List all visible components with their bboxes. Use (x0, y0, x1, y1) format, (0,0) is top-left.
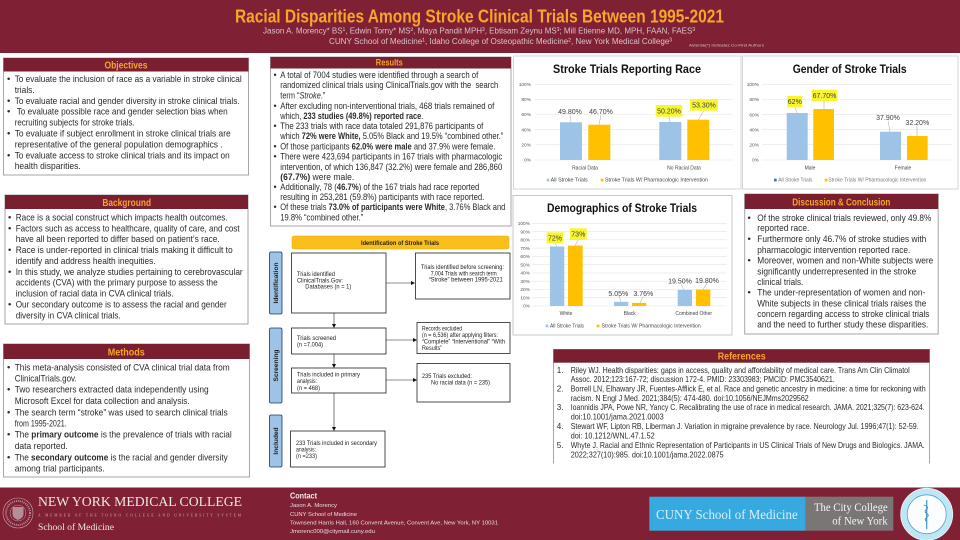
text block: objectives: • (7, 150, 10, 161)
x axis labels: Male (805, 165, 816, 171)
text block: methods: among trial participants. (15, 464, 105, 475)
authors: Jason A. Morency* BS¹, Edwin Torny* MS², Maya Pandit MPH³, Ebtisam Zeynu MS³; Mill Etienne MD, MPH, FAAN, FAES³ (263, 26, 695, 36)
box: trials screened: Trials screened (297, 335, 336, 342)
text block: results: • (274, 70, 277, 80)
text block: objectives: To evaluate possible race and gender selection bias when (17, 107, 228, 118)
y axis labels: 50% (520, 262, 531, 268)
x axis labels: Female (895, 165, 912, 171)
y axis labels: 70% (520, 246, 531, 252)
text block: references: 1. (557, 366, 563, 375)
box: trials identified before screening: 7,004 Trials with search term (431, 270, 497, 277)
text block: references: Riley WJ. Health disparities: gaps in access, quality and affordability of medical care. Trans Am Clin Climatol (571, 366, 910, 375)
data labels: 73% (571, 232, 585, 239)
text block: methods: The search term “stroke” was used to search clinical trials (15, 407, 228, 418)
data labels: 32.20% (905, 120, 929, 127)
logo: new york medical college wordmark: A MEMBER OF THE TOURO COLLEGE AND UNIVERSITY SYSTEM (38, 513, 242, 517)
y axis labels (519, 82, 532, 164)
text block: methods: from 1995-2021. (15, 418, 67, 429)
text block: results: which, 233 studies (49.8%) reported race. (279, 111, 423, 121)
heading: results: Results (376, 58, 403, 68)
logo: cuny school of medicine: CUNY School of Medicine (656, 507, 798, 522)
text block: objectives: health disparities. (15, 161, 81, 172)
text block: methods: Two researchers extracted data independently using (15, 385, 209, 396)
x axis labels: No Racial Data (667, 165, 701, 171)
text block: background: Race is under-reported in clinical trials making it difficult to (16, 245, 233, 256)
text block: background (8, 212, 243, 322)
y axis labels (747, 82, 760, 164)
x axis labels: Black (624, 311, 636, 317)
chart: stroke trials reporting race (514, 56, 741, 189)
contact block: Townsend Harris Hall, 160 Convent Avenue, Convent Ave, New York, NY 10031 (290, 520, 498, 526)
text block: results: • (274, 182, 277, 192)
text block: methods: • (7, 362, 10, 373)
text block: methods: ClinicalTrials.gov. (15, 373, 77, 384)
data labels: 3.76% (633, 291, 653, 298)
text block: background: Our secondary outcome is to assess the racial and gender (16, 300, 227, 311)
text block: background: • (8, 300, 11, 311)
contact block: Jmorenc000@citymail.cuny.edu (290, 529, 375, 535)
stage label: identification: Identification (273, 262, 280, 304)
text block: background: Race is a social construct which impacts health outcomes. (16, 212, 228, 223)
box: trials included in secondary analysis: (n =233) (296, 453, 317, 460)
text block: results: which 72% were White, 5.05% Black and 19.5% “combined other.” (279, 131, 503, 141)
panel: references (554, 349, 930, 464)
text block: references: Assoc. 2012;123:167-72; discussion 172-4. PMID: 23303983; PMCID: PMC3540621. (571, 375, 835, 384)
y axis labels: 60% (520, 254, 531, 260)
text block: discussion and conclusion: Moreover, women and non-White subjects were (757, 256, 933, 267)
legend: Stroke Trials W/ Pharmacologic Intervention (828, 178, 927, 184)
text block: references: doi:10.1001/jama.2021.0003 (571, 412, 664, 422)
co-first author note: Asterisk(*) Indicates Co-First Authors (689, 44, 764, 48)
text block: results: randomized clinical trials using ClinicalTrials.gov with the search (280, 80, 498, 90)
text block: background: inclusion of racial data in CVA clinical trials. (16, 289, 174, 300)
contact block (290, 491, 498, 535)
y axis labels: 0% (524, 158, 532, 164)
box: trials screened (292, 328, 386, 354)
y axis labels: 60% (521, 112, 532, 118)
logo: new york medical college wordmark: School of Medicine (38, 522, 114, 533)
logo: new york medical college wordmark: NEW YORK MEDICAL COLLEGE (38, 495, 242, 510)
box: trials identified: Trials identified (297, 271, 335, 278)
y axis labels: 20% (520, 287, 531, 293)
text block: objectives: • (7, 96, 10, 107)
header banner (0, 0, 960, 53)
data labels (787, 90, 929, 136)
text block: results: • (274, 121, 277, 131)
text block: references: racism. N Engl J Med. 2021;384(5): 474-480. doi:10.1056/NEJMms2029562 (571, 394, 809, 403)
text block: background: • (8, 212, 11, 223)
stage label: included: Included (273, 427, 280, 455)
data labels: 50.20% (657, 108, 681, 115)
text block: objectives: To evaluate the inclusion of race as a variable in stroke clinical (15, 74, 242, 85)
flow diagram: identification of stroke trials (270, 236, 510, 467)
box: records excluded: “Complete” “Interventional” “With (422, 339, 505, 346)
chart: gender of stroke trials (742, 56, 958, 189)
text block: methods: data reported. (15, 441, 68, 452)
panel: methods (4, 344, 250, 477)
logo: medical school seal (901, 488, 953, 540)
text block: objectives: • (7, 107, 10, 118)
text block: objectives (7, 74, 242, 172)
box: records excluded: Results” (422, 345, 442, 352)
y axis labels: 80% (521, 97, 532, 103)
bars (787, 109, 928, 160)
text block: discussion and conclusion: concern regarding access to stroke clinical trials (757, 309, 930, 320)
box: records excluded: (n = 6,536) after applying filters: (422, 332, 498, 339)
y axis labels (518, 221, 531, 310)
text block: results: resulting in 253,281 (59.8%) participants with race reported. (280, 192, 484, 202)
text block: objectives: • (7, 128, 10, 140)
box: trials included in secondary analysis (290, 431, 385, 467)
box: trials included in secondary analysis: analysis: (296, 446, 316, 454)
text block: references: 2. (557, 384, 563, 394)
text block: references: 4. (557, 422, 563, 431)
y axis labels: 90% (520, 229, 531, 235)
box: trials included in secondary analysis: 233 Trials included in secondary (296, 440, 378, 447)
text block: background: • (8, 245, 11, 256)
text block: methods: The secondary outcome is the racial and gender diversity (15, 452, 228, 463)
text block: results: Of those participants 62.0% were male and 37.9% were female. (280, 142, 495, 152)
arrows (332, 281, 417, 431)
text block: discussion and conclusion: • (748, 213, 751, 224)
panel: results (270, 57, 511, 226)
chart title: Demographics of Stroke Trials (547, 201, 697, 215)
bars (550, 246, 710, 306)
stage label: screening (270, 328, 282, 403)
box: trials identified before screening (416, 253, 510, 299)
text block: background: have all been reported to differ based on patient’s race. (16, 234, 220, 245)
contact block: Contact (290, 491, 317, 500)
text block: discussion and conclusion: Of the stroke clinical trials reviewed, only 49.8% (757, 213, 932, 224)
box: trials included in primary analysis: Trials included in primary (297, 372, 361, 379)
text block: results: • (274, 101, 277, 111)
y axis labels: 60% (749, 112, 760, 118)
legend (546, 324, 701, 330)
legend (774, 178, 927, 184)
data labels: 19.80% (695, 278, 719, 285)
text block: methods: • (7, 385, 10, 396)
text block: references: 3. (557, 403, 563, 412)
text block: discussion and conclusion (748, 213, 933, 331)
box: trials excluded: 235 Trials excluded: (422, 373, 472, 380)
text block: discussion and conclusion: • (748, 256, 751, 267)
text block: results: The 233 trials with race data totaled 291,876 participants of (280, 121, 484, 131)
legend: All Stroke Trials (550, 324, 584, 330)
heading: methods: Methods (108, 347, 145, 358)
x axis labels (572, 165, 701, 171)
title: Racial Disparities Among Stroke Clinical Trials Between 1995-2021 (235, 6, 724, 26)
logo: the city college of new york: of New York (832, 514, 888, 528)
text block: background: • (8, 267, 11, 278)
box: trials identified: ClinicalTrials.Gov: (297, 277, 343, 284)
stage label: included (270, 415, 282, 467)
text block: methods: The primary outcome is the prevalence of trials with racial (15, 430, 232, 441)
text block: references: 2022;327(10):985. doi:10.1001/jama.2022.0875 (571, 450, 724, 460)
text block: background: identify and address health inequities. (16, 256, 156, 267)
text block: objectives: recruiting subjects for stroke trials. (15, 118, 135, 129)
footer banner (0, 488, 960, 540)
text block: discussion and conclusion: • (748, 288, 751, 299)
text block: results: A total of 7004 studies were identified through a search of (280, 70, 479, 80)
text block: discussion and conclusion: White subjects in these clinical trials raises the (757, 298, 926, 309)
box: records excluded: Records excluded (422, 325, 462, 332)
x axis labels (560, 311, 712, 317)
bars (560, 120, 709, 160)
box: trials screened: (n =7,004) (297, 341, 323, 348)
box: trials included in primary analysis: analysis: (297, 378, 317, 385)
logo: the city college of new york: The City College (814, 500, 888, 514)
text block: objectives: To evaluate if subject enrollment in stroke clinical trials are (15, 128, 231, 140)
text block: discussion and conclusion: reported race. (757, 223, 809, 234)
y axis labels: 0% (752, 158, 760, 164)
text block: background: • (8, 223, 11, 234)
data labels: 72% (548, 235, 562, 242)
logo: new york medical college seal (3, 498, 33, 528)
text block: results: 19.8% “combined other.” (280, 212, 363, 222)
text block: results: Of these trials 73.0% of participants were White, 3.76% Black and (280, 202, 505, 212)
y axis labels: 100% (747, 82, 760, 88)
text block: results: There were 423,694 participants in 167 trials with pharmacologic (280, 152, 503, 162)
logo: new york medical college wordmark (38, 495, 242, 533)
flow diagram title bar: Identification of Stroke Trials (361, 240, 439, 247)
text block: methods: • (7, 407, 10, 418)
y axis labels: 80% (520, 238, 531, 244)
stage label: screening: Screening (273, 350, 280, 381)
text block: objectives: To evaluate racial and gender diversity in stroke clinical trials. (15, 96, 240, 107)
box: records excluded (417, 322, 510, 354)
heading: background: Background (102, 198, 151, 209)
heading: objectives: Objectives (104, 60, 148, 72)
data labels: 37.90% (876, 115, 900, 122)
data labels: 46.70% (589, 109, 613, 116)
text block: references (557, 366, 926, 460)
text block: objectives: trials. (15, 85, 35, 96)
y axis labels: 40% (520, 271, 531, 277)
data labels (547, 228, 719, 303)
text block: background: In this study, we analyze studies pertaining to cerebrovascular (16, 267, 243, 278)
box: trials excluded: No racial data (n = 235) (431, 379, 490, 386)
text block: results: • (274, 142, 277, 152)
data labels: 53.30% (692, 102, 716, 110)
text block: methods: This meta-analysis consisted of CVA clinical trial data from (15, 362, 230, 373)
panel: background (5, 195, 248, 324)
y axis labels: 40% (521, 127, 532, 133)
text block: references: 5. (557, 441, 563, 450)
y axis labels: 100% (519, 82, 532, 88)
y axis labels: 0% (523, 304, 531, 310)
text block: background: Factors such as access to healthcare, quality of care, and cost (16, 223, 240, 234)
x axis labels: Racial Data (572, 165, 598, 171)
chart: demographics of stroke trials (513, 196, 732, 335)
x axis labels: White (560, 311, 573, 317)
text block: results: • (274, 152, 277, 162)
text block: methods: • (7, 452, 10, 463)
text block: objectives: representative of the general population demographics . (15, 139, 223, 150)
data labels: 5.05% (608, 291, 628, 298)
text block: references: Stewart WF, Lipton RB, Liberman J. Variation in migraine prevalence by race. Neurology Jul. 1996;47(1): 52-59. (571, 422, 919, 431)
chart title: Stroke Trials Reporting Race (553, 62, 701, 76)
text block: references: doi: 10.1212/WNL.47.1.52 (571, 432, 655, 440)
logo: the city college of new york (806, 497, 893, 531)
text block: discussion and conclusion: • (748, 234, 751, 245)
text block: methods: • (7, 430, 10, 441)
data labels: 62% (788, 99, 802, 106)
text block: results (274, 70, 505, 222)
text block: results: intervention, of which 136,847 (32.2%) were female and 286,860 (280, 162, 502, 172)
y axis labels: 80% (749, 97, 760, 103)
box: trials identified before screening: “Stroke” between 1995-2021 (429, 277, 503, 284)
chart title: Gender of Stroke Trials (793, 62, 907, 76)
text block: results: term “Stroke.” (280, 90, 325, 100)
contact block: CUNY School of Medicine (290, 512, 357, 518)
logo: cuny school of medicine (649, 497, 806, 531)
data labels: 19.50% (668, 278, 692, 286)
data labels: 67.70% (813, 93, 836, 100)
text block: discussion and conclusion: Furthermore only 46.7% of stroke studies with (757, 234, 926, 245)
text block: discussion and conclusion: The under-representation of women and non- (757, 288, 925, 299)
legend: All Stroke Trials (778, 178, 813, 184)
text block: discussion and conclusion: significantly underrepresented in the stroke (757, 266, 916, 277)
y axis labels: 30% (520, 279, 531, 285)
text block: discussion and conclusion: pharmacologic intervention reported race. (757, 245, 910, 256)
box: trials identified before screening: Trials identified before screening: (421, 264, 504, 271)
heading: discussion and conclusion: Discussion & Conclusion (792, 197, 890, 208)
y axis labels: 20% (749, 142, 760, 148)
contact block: Jason A. Morency (290, 503, 337, 509)
text block: results: After excluding non-interventional trials, 468 trials remained of (280, 101, 495, 111)
legend: All Stroke Trials (551, 178, 588, 184)
y axis labels: 40% (749, 127, 760, 133)
box: trials identified (292, 253, 386, 313)
legend (547, 178, 708, 184)
text block: discussion and conclusion: clinical trials. (757, 277, 803, 288)
text block: objectives: To evaluate access to stroke clinical trials and its impact on (15, 150, 230, 161)
legend: Stroke Trials W/ Pharmacologic Intervention (602, 324, 701, 330)
panel: objectives (4, 58, 248, 175)
data labels: 49.80% (558, 109, 582, 116)
text block: background: diversity in CVA clinical trials. (16, 311, 121, 322)
x axis labels: Combined Other (675, 311, 712, 317)
flow diagram title bar (292, 236, 509, 249)
affiliations: CUNY School of Medicine¹, Idaho College of Osteopathic Medicine², New York Medical College³ (329, 36, 672, 46)
text block: discussion and conclusion: and the need to further study these disparities. (757, 320, 928, 331)
text block: objectives: • (7, 74, 10, 85)
heading: references: References (718, 352, 766, 363)
data labels (558, 99, 718, 124)
panel: discussion and conclusion (745, 194, 938, 334)
text block: methods: Microsoft Excel for data collection and analysis. (15, 396, 190, 407)
legend: Stroke Trials W/ Pharmacologic Intervention (605, 178, 708, 184)
text block: results: (67.7%) were male. (280, 172, 354, 182)
box: trials included in primary analysis (292, 368, 386, 393)
text block: results: Additionally, 78 (46.7%) of the 167 trials had race reported (280, 182, 479, 192)
y axis labels: 20% (521, 142, 532, 148)
y axis labels: 10% (520, 295, 531, 301)
text block: methods (7, 362, 232, 475)
stage label: identification (270, 252, 282, 314)
x axis labels (805, 165, 912, 171)
text block: background: accidents (CVA) with the primary purpose to assess the (16, 278, 218, 289)
box: trials identified: Databases (n = 1) (305, 284, 351, 291)
box: trials excluded (417, 364, 510, 402)
y axis labels: 100% (518, 221, 531, 227)
text block: results: • (274, 202, 277, 212)
box: trials included in primary analysis: (n = 468) (297, 385, 320, 392)
